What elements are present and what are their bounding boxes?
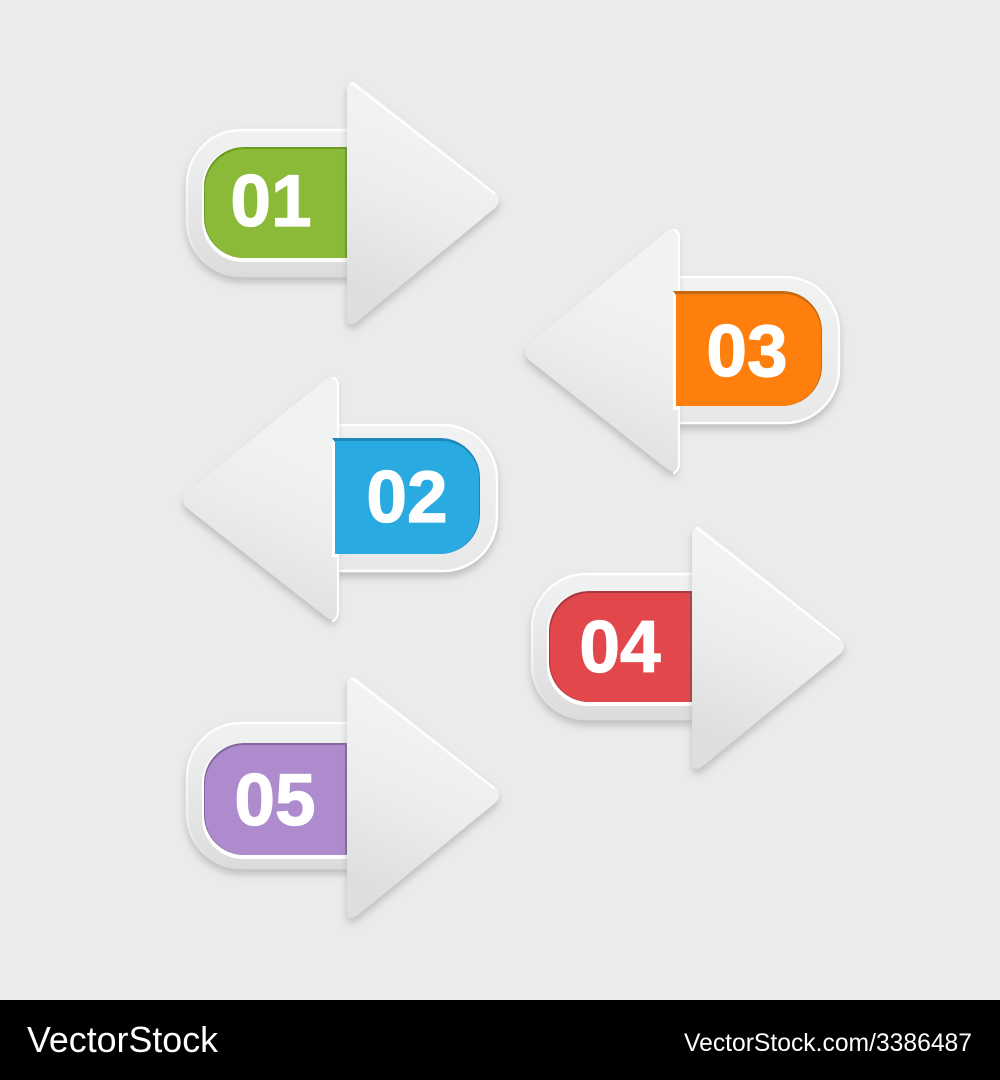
- number 01: 01: [230, 161, 312, 242]
- arrow 03 tail: [677, 277, 839, 423]
- arrow 02 head: [183, 377, 338, 621]
- arrow 03 number panel: [673, 291, 822, 410]
- arrow 01 number panel: [202, 147, 347, 262]
- arrow 04 number panel: [547, 591, 692, 706]
- arrow 02 number panel: [332, 438, 480, 557]
- number 04: 04: [579, 607, 661, 688]
- number 03: 03: [706, 311, 788, 392]
- arrow 04 tail: [532, 574, 694, 719]
- arrow 05: purple, pointing right: [187, 677, 499, 918]
- footer image id text: VectorStock.com/3386487: [684, 1029, 972, 1057]
- arrow 05 number panel: [202, 743, 347, 859]
- footer bar: [0, 1000, 1000, 1080]
- footer logo text: VectorStock: [27, 1019, 219, 1060]
- number 05: 05: [234, 760, 316, 841]
- arrow 03: orange, pointing left: [525, 229, 839, 473]
- arrow 05 head: [347, 677, 499, 918]
- arrow 04 head: [692, 527, 844, 769]
- arrow 04: red, pointing right: [532, 527, 844, 769]
- arrow 01: green, pointing right: [187, 82, 499, 324]
- arrow 03 head: [525, 229, 679, 473]
- arrow 02: blue, pointing left: [183, 377, 497, 621]
- arrow 01 tail: [187, 130, 349, 276]
- arrow 02 tail: [336, 425, 497, 571]
- number 02: 02: [366, 457, 448, 538]
- arrow 01 head: [347, 82, 499, 324]
- arrow 05 tail: [187, 723, 349, 868]
